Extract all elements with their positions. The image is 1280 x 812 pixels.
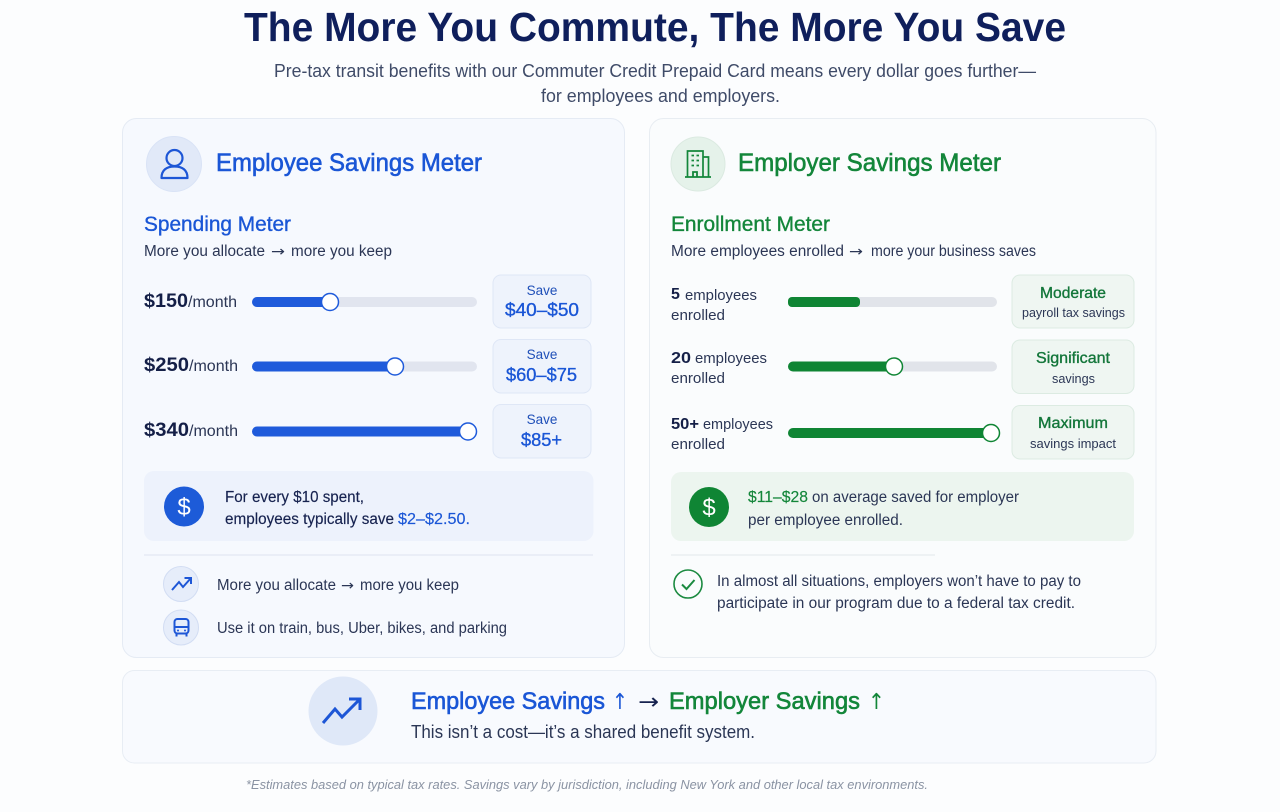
subtitle: Pre-tax transit benefits with our Commuter Credit Prepaid Card means every dollar goes further— — [274, 61, 1036, 81]
meter row: $340 per month — [144, 404, 591, 458]
list item: where to use — [164, 610, 507, 645]
meter row: $150 per month: Save — [527, 283, 557, 298]
footnote: *Estimates based on typical tax rates. Savings vary by jurisdiction, including New York and other local tax environments. — [246, 777, 928, 792]
callout: every $10 spent: employees typically save — [225, 511, 394, 528]
meter row: 20 employees — [671, 340, 1134, 394]
list item: allocate more: More you allocate — [217, 577, 336, 594]
meter row: $250 per month: $250 — [144, 355, 189, 376]
equation: employee savings to employer savings: → — [638, 690, 659, 715]
equation: employee savings to employer savings — [411, 688, 885, 715]
text: enrollment meter description: → — [849, 244, 863, 260]
callout: every $10 spent — [144, 471, 594, 541]
icon: dollar coin: $ — [702, 494, 716, 522]
callout: employer average savings: $11–$28 — [748, 489, 808, 506]
equation: employee savings to employer savings: ↑ — [612, 690, 628, 715]
panel: employee savings meter — [122, 118, 624, 658]
meter row: 20 employees: enrolled — [671, 370, 725, 387]
meter row: 50+ employees: 50+ — [671, 416, 699, 433]
meter row: 5 employees: employees — [685, 287, 757, 304]
meter row: 50+ employees: enrolled — [671, 436, 725, 453]
heading: employer savings meter: Employer Savings Meter — [738, 149, 1001, 177]
text: spending meter description: → — [271, 244, 285, 260]
icon: person — [146, 136, 202, 192]
icon: dollar coin — [689, 487, 729, 527]
meter row: $340 per month: $340 — [144, 420, 189, 441]
meter row: 20 employees: employees — [695, 350, 767, 367]
meter row: 5 employees: enrolled — [671, 307, 725, 324]
list item: allocate more — [164, 566, 459, 602]
meter row: $250 per month: /month — [189, 358, 238, 375]
meter row: $150 per month — [144, 275, 591, 328]
meter row: 5 employees: 5 — [671, 286, 680, 303]
callout: every $10 spent: $2–$2.50. — [398, 511, 470, 528]
meter row: $340 per month: Save — [527, 412, 557, 427]
callout: employer average savings — [671, 472, 1134, 541]
panel: shared benefit banner — [122, 670, 1156, 763]
icon: dollar coin — [164, 486, 204, 526]
list item: allocate more: → — [341, 578, 354, 594]
meter row: 50+ employees: employees — [703, 416, 773, 433]
meter row: $150 per month: $40–$50 — [505, 300, 579, 320]
callout: employer average savings: per employee enrolled. — [748, 512, 903, 529]
callout: employer average savings: on average saved for employer — [812, 489, 1019, 506]
meter row: $250 per month: $60–$75 — [506, 365, 577, 385]
meter row: $340 per month: /month — [189, 423, 238, 440]
subheading: spending meter: Spending Meter — [144, 213, 291, 236]
subtitle: for employees and employers. — [541, 86, 780, 106]
meter row: 50+ employees: savings impact — [1030, 436, 1116, 451]
heading: employee savings meter: Employee Savings Meter — [216, 149, 482, 177]
equation: employee savings to employer savings: Employee Savings — [411, 688, 605, 715]
title: The More You Commute, The More You Save — [244, 4, 1066, 50]
meter row: 50+ employees: Maximum — [1038, 415, 1108, 432]
meter row: $250 per month: Save — [527, 347, 557, 362]
note: federal tax credit: participate in our program due to a federal tax credit. — [717, 595, 1075, 612]
text: enrollment meter description: More employees enrolled — [671, 243, 844, 260]
meter row: 5 employees — [671, 275, 1134, 328]
meter row: $250 per month — [144, 340, 591, 393]
meter row: 5 employees: payroll tax savings — [1022, 305, 1125, 320]
meter row: 20 employees: Significant — [1036, 350, 1111, 367]
meter row: $150 per month: $150 — [144, 291, 188, 312]
icon: dollar coin: $ — [177, 494, 191, 521]
meter row: $150 per month: /month — [188, 294, 237, 311]
text: shared benefit statement: This isn’t a cost—it’s a shared benefit system. — [411, 722, 755, 742]
note: federal tax credit — [674, 570, 1081, 612]
icon: building — [671, 137, 725, 191]
meter row: $340 per month: $85+ — [521, 430, 562, 450]
equation: employee savings to employer savings: Employer Savings — [669, 688, 860, 715]
text: enrollment meter description: more your business saves — [871, 243, 1036, 260]
meter row: 5 employees: Moderate — [1040, 285, 1106, 302]
meter row: 20 employees: 20 — [671, 350, 691, 367]
icon: trend up — [308, 676, 378, 746]
meter row: 50+ employees — [671, 406, 1134, 459]
panel: employer savings meter — [650, 118, 1156, 658]
equation: employee savings to employer savings: ↑ — [868, 690, 885, 715]
text: spending meter description: More you allocate — [144, 243, 265, 260]
text: spending meter description — [144, 243, 392, 260]
meter row: 20 employees: savings — [1052, 371, 1095, 386]
note: federal tax credit: In almost all situations, employers won’t have to pay to — [717, 573, 1081, 590]
subheading: enrollment meter: Enrollment Meter — [671, 213, 830, 236]
text: enrollment meter description — [671, 243, 1036, 260]
callout: every $10 spent: For every $10 spent, — [225, 489, 364, 506]
text: spending meter description: more you keep — [291, 243, 392, 260]
list item: allocate more: more you keep — [360, 577, 459, 594]
list item: where to use: Use it on train, bus, Uber, bikes, and parking — [217, 620, 507, 637]
subtitle — [274, 61, 1036, 106]
